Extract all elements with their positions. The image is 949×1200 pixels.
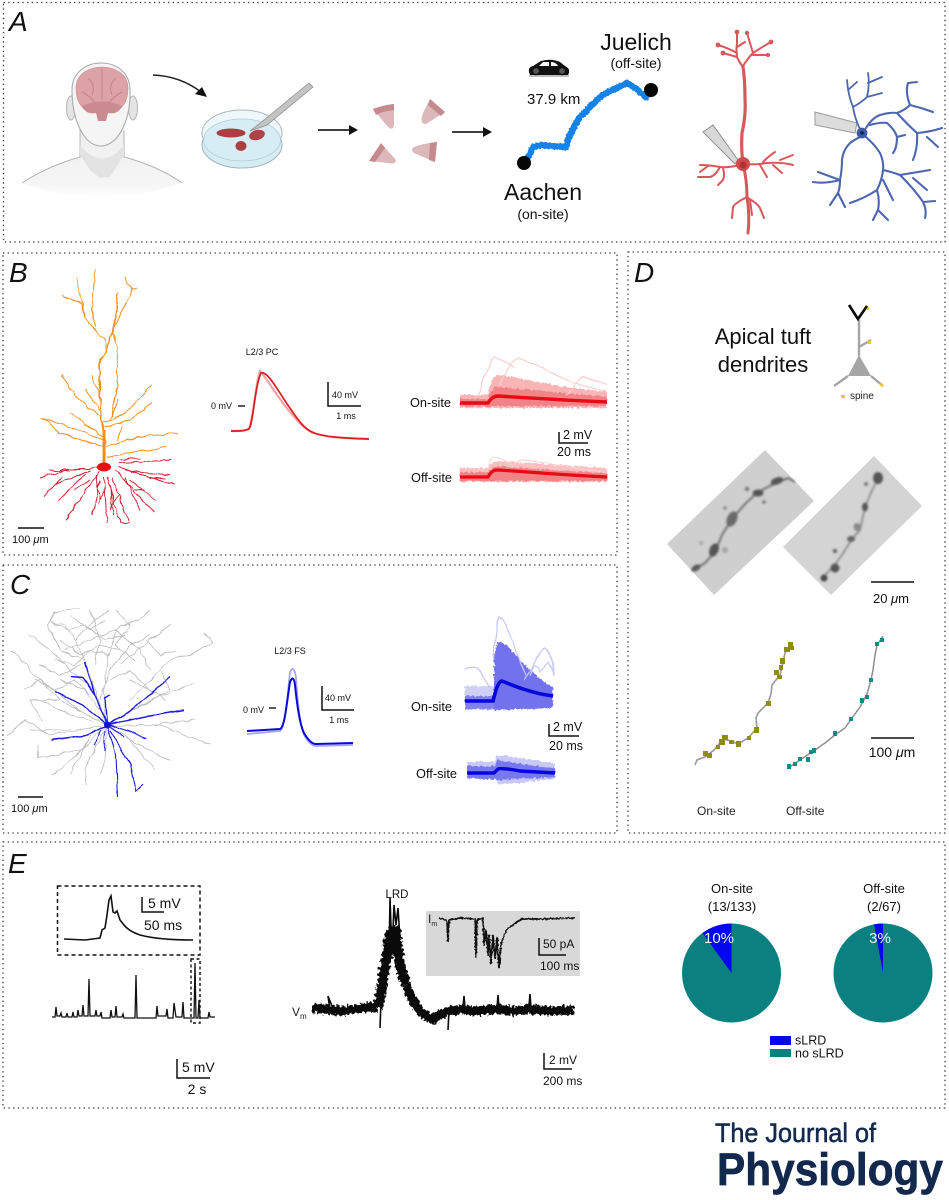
scale bar: 2 mV 20 ms, panel B [557, 428, 593, 459]
scale bar: 5 mV 2 s: 2 s [188, 1081, 206, 1097]
label: L2/3 FS: L2/3 FS [274, 646, 306, 656]
label: on-site: (on-site) [517, 206, 569, 222]
LRD voltage trace [312, 898, 574, 1030]
inset: current trace on gray background: 50 pA [543, 937, 574, 951]
label: L2/3 PC: L2/3 PC [246, 347, 279, 357]
panel letter E: E [8, 848, 27, 879]
scale bar: 2 mV 20 ms, panel B: 20 ms [557, 445, 591, 459]
scale bar: 2 mV 20 ms, panel B: 2 mV [563, 428, 593, 442]
icon: petri dish with tissue and forceps [202, 83, 313, 168]
label: Vm: V [292, 1005, 300, 1019]
zero millivolt marker, panel C: 0 mV [243, 705, 264, 715]
EPSP traces: off-site pyramidal [460, 457, 607, 482]
inset: current trace on gray background: I [428, 912, 431, 926]
scale bar 20 um: 20 μm [873, 591, 909, 606]
action potential trace: fast-spiking [247, 669, 353, 746]
scale bar: 40 mV 1 ms, panel C: 1 ms [329, 715, 349, 725]
scale bar: 40 mV 1 ms: 1 ms [336, 411, 356, 421]
inset: current trace on gray background: 100 ms [540, 959, 579, 973]
label: Off-site: Off-site [411, 470, 452, 485]
scale bar: 2 mV 200 ms [543, 1053, 582, 1088]
scale bar 100 um: 100 μm [12, 534, 49, 546]
zero millivolt marker: 0 mV [211, 401, 232, 411]
heading line two: dendrites [718, 352, 808, 377]
scale bar: 40 mV 1 ms: 40 mV [332, 390, 358, 400]
scale bar: 5 mV 2 s: 5 mV [182, 1059, 215, 1075]
panel letter A: A [7, 6, 28, 37]
panel A: experimental workflow [4, 2, 945, 242]
icon: human head with brain [22, 63, 182, 198]
scale bar: 2 mV 200 ms: 200 ms [543, 1074, 582, 1088]
scale bar: 2 mV 20 ms, panel C [549, 720, 583, 753]
label: Vm: m [300, 1012, 307, 1021]
icon: blue interneuron with pipette [813, 73, 942, 220]
zero millivolt marker, panel C [243, 705, 276, 715]
icon: neuron schematic with spines [834, 305, 884, 402]
label: On-site: On-site [410, 395, 451, 410]
pie chart: on-site [682, 881, 781, 1022]
scale bar 20 um [871, 582, 914, 606]
pie legend [770, 1034, 844, 1060]
heading: Apical tuft dendrites: Apical tuft [715, 324, 811, 349]
label: Juelich off-site: Juelich [600, 29, 672, 55]
panel B: pyramidal cell [3, 253, 617, 555]
scale bar: 40 mV 1 ms, panel C: 40 mV [325, 693, 351, 703]
inset: current trace on gray background [426, 911, 580, 976]
pie chart: on-site: On-site [711, 881, 753, 896]
journal logo [715, 1118, 943, 1195]
pie chart: on-site: 10% [704, 930, 734, 947]
panel letter C: C [10, 569, 31, 600]
icon: car [529, 60, 569, 76]
EPSP traces: off-site fast-spiking [467, 755, 555, 784]
micrograph: on-site dendrite [667, 450, 814, 595]
scale bar: 40 mV 1 ms, panel C [322, 686, 354, 725]
scale bar: 40 mV 1 ms [328, 382, 361, 421]
pie chart: off-site: (2/67) [867, 899, 901, 914]
label: LRD: LRD [385, 889, 409, 901]
scale bar: 5 mV 2 s [177, 1059, 215, 1097]
arrow: slices to route [452, 127, 492, 137]
scale bar 100 um [12, 528, 49, 546]
inset: current trace on gray background: m [431, 921, 437, 928]
journal logo: The Journal of [715, 1118, 876, 1148]
icon: tissue slices [369, 99, 445, 164]
pie chart: off-site: Off-site [863, 881, 905, 896]
zero millivolt marker [211, 401, 245, 411]
pie chart: on-site: (13/133) [708, 899, 756, 914]
icon: red pyramidal neuron with pipette [698, 30, 793, 233]
distance label: 37.9 km [527, 91, 580, 108]
label: Off-site, panel C: Off-site [416, 766, 457, 781]
action potential trace: pyramidal [231, 371, 369, 439]
pie legend: no sLRD [795, 1046, 844, 1060]
panel letter D: D [634, 257, 654, 288]
panel letter B: B [9, 257, 28, 288]
route map Aachen to Juelich [517, 83, 658, 170]
pie chart: off-site [834, 881, 932, 1022]
inset: expanded event: 50 ms [144, 917, 182, 933]
long membrane potential trace [52, 959, 215, 1023]
micrograph: off-site dendrite [783, 456, 922, 595]
pie legend: sLRD [795, 1034, 826, 1048]
icon: neuron schematic with spines: spine [850, 391, 874, 402]
EPSP traces: on-site pyramidal [460, 358, 607, 408]
neuron morphology: fast-spiking with axon [8, 608, 213, 798]
panel C: fast-spiking cell [3, 565, 617, 833]
arrow: dish to slices [318, 125, 358, 135]
arrow: head to dish [153, 75, 207, 97]
reconstruction: on-site dendrite with spines [695, 642, 794, 765]
EPSP traces: on-site fast-spiking [465, 617, 553, 710]
pie chart: off-site: 3% [869, 930, 891, 947]
scale bar 100 um, panel C: 100 μm [11, 803, 48, 815]
inset: expanded event [58, 886, 200, 955]
label: On-site, panel D: On-site [697, 804, 736, 818]
label: off-site: (off-site) [610, 55, 662, 71]
reconstruction: off-site dendrite with spines [787, 636, 884, 769]
scale bar: 2 mV 20 ms, panel C: 20 ms [549, 739, 583, 753]
scale bar 100 um, panel D: 100 μm [869, 744, 915, 760]
panel E: LRD recordings and pie charts [3, 842, 945, 1108]
scale bar 100 um, panel C [11, 797, 48, 815]
panel D: apical tuft dendrites [628, 252, 945, 833]
label: Aachen on-site: Aachen [504, 179, 582, 205]
scale bar: 2 mV 200 ms: 2 mV [549, 1053, 577, 1067]
neuron morphology: pyramidal [40, 270, 178, 523]
scale bar: 2 mV 20 ms, panel C: 2 mV [553, 720, 583, 734]
label: On-site, panel C: On-site [411, 699, 452, 714]
inset: expanded event: 5 mV [148, 895, 181, 911]
label: Off-site, panel D: Off-site [786, 804, 825, 818]
